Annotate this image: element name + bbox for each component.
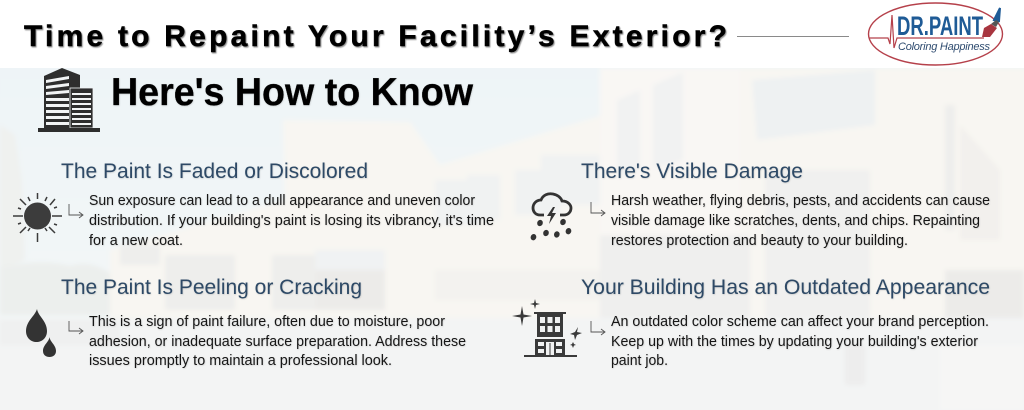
- body text: faded: for a new coat.: [89, 233, 183, 249]
- panel: visible damage: [530, 160, 990, 249]
- body text: damage: visible damage like scratches, dents, and chips. Repainting: [611, 213, 980, 229]
- logo pulse line: [869, 15, 984, 48]
- heading: outdated: Your Building Has an Outdated Appearance: [581, 276, 990, 299]
- logo wordmark: DR.PAINT: [897, 11, 983, 41]
- logo tagline: Coloring Happiness: [898, 41, 990, 53]
- heading: peeling: The Paint Is Peeling or Cracking: [61, 276, 362, 299]
- panel: outdated appearance: [512, 276, 990, 369]
- title: Time to Repaint Your Facility’s Exterior?: [24, 20, 727, 53]
- body text: outdated: An outdated color scheme can affect your brand perception.: [611, 314, 989, 330]
- arrow: [69, 204, 83, 218]
- logo paint brush: [982, 8, 1000, 37]
- body text: peeling: [89, 314, 466, 369]
- body text: faded: [89, 193, 494, 249]
- body text: outdated: paint job.: [611, 353, 668, 369]
- heading: faded: The Paint Is Faded or Discolored: [61, 160, 368, 183]
- body text: peeling: This is a sign of paint failure, often due to moisture, poor: [89, 314, 445, 330]
- arrow: [591, 202, 605, 216]
- arrow: [69, 321, 83, 334]
- panel: peeling or cracking: [26, 276, 466, 369]
- heading: how to know: Here's How to Know: [111, 71, 474, 114]
- body text: outdated: Keep up with the times by updating your building's exterior: [611, 334, 978, 350]
- logo: Dr. Paint: [868, 3, 1002, 65]
- title rule: [737, 36, 849, 37]
- body text: damage: restores protection and beauty to your building.: [611, 233, 908, 249]
- icon: paint drops: [26, 309, 56, 357]
- body text: faded: distribution. If your building's paint is losing its vibrancy, it's time: [89, 213, 494, 229]
- body text: peeling: issues promptly to maintain a professional look.: [89, 353, 392, 369]
- icon: sparkling hotel: [512, 299, 582, 357]
- icon: storm cloud: [530, 194, 572, 241]
- body text: damage: [611, 193, 990, 249]
- body text: peeling: adhesion, or inadequate surface preparation. Address these: [89, 334, 466, 350]
- icon: office buildings: [38, 68, 100, 132]
- body text: outdated: [611, 314, 989, 369]
- arrow: [591, 321, 605, 335]
- body text: damage: Harsh weather, flying debris, pests, and accidents can cause: [611, 193, 990, 209]
- body text: faded: Sun exposure can lead to a dull appearance and uneven color: [89, 193, 475, 209]
- panel: faded or discolored: [13, 160, 494, 249]
- icon: sun: [13, 193, 62, 242]
- heading: damage: There's Visible Damage: [581, 160, 803, 183]
